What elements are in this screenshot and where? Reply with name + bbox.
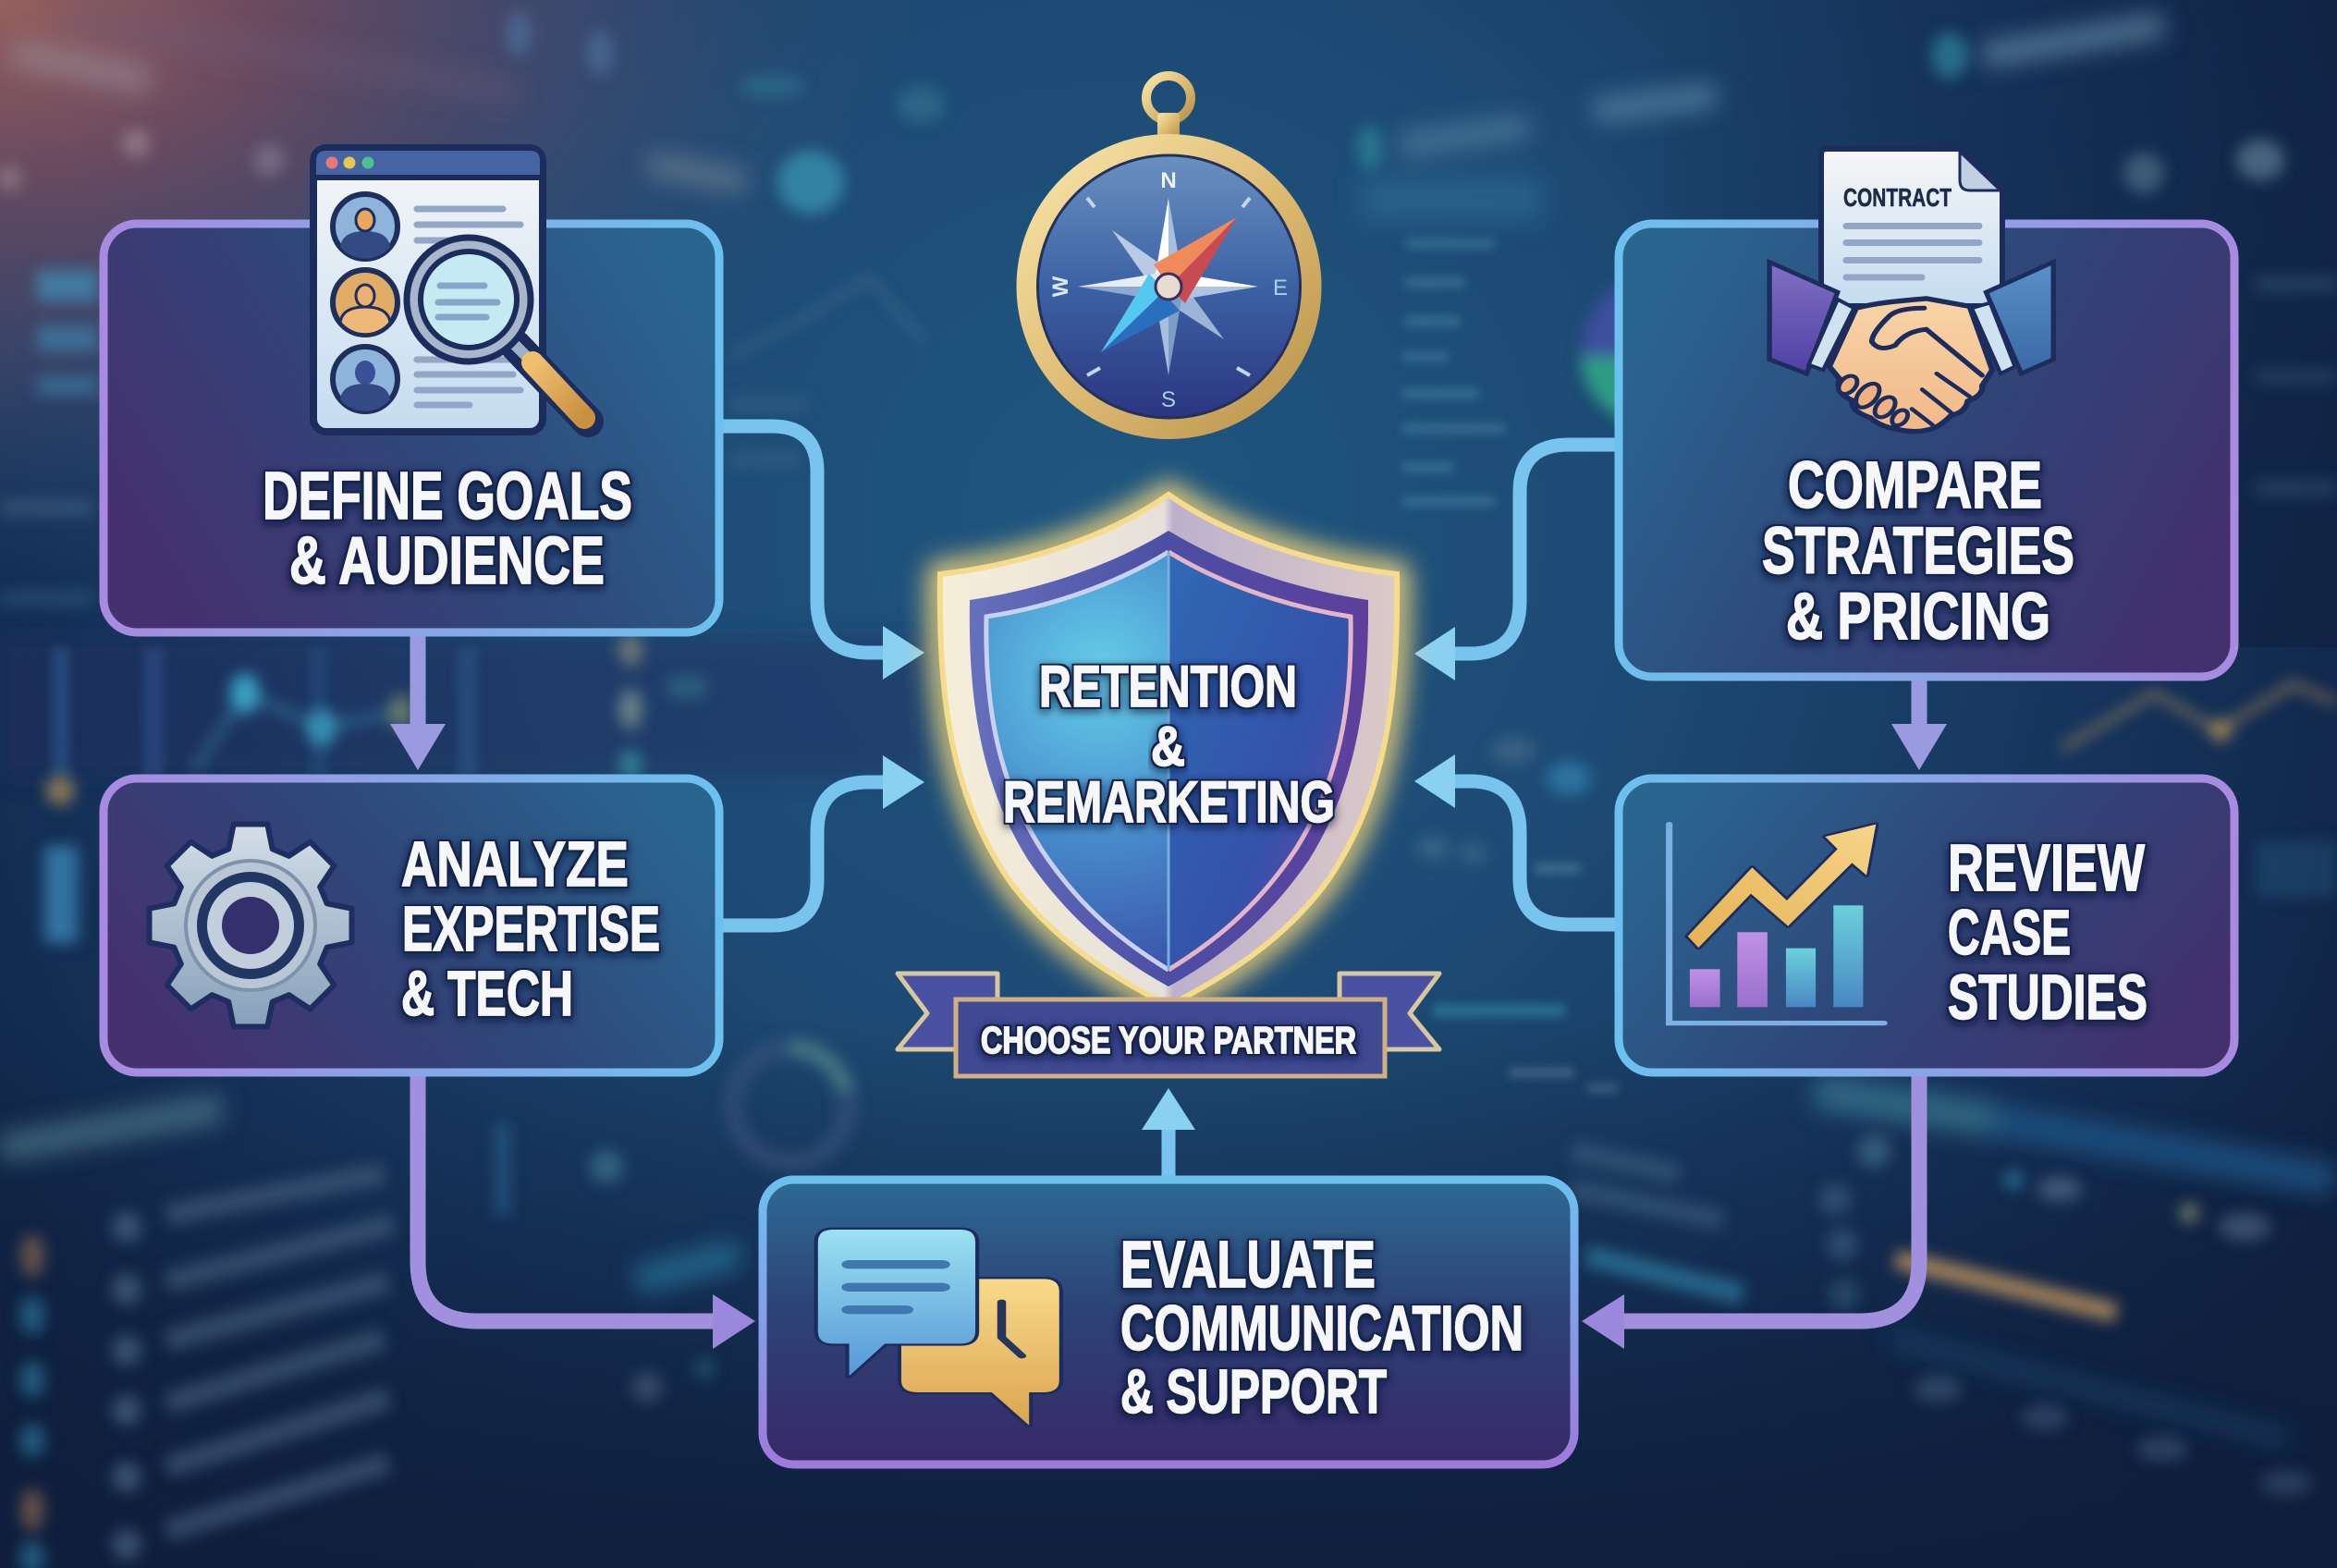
label: retention and remarketing: REMARKETING <box>1003 770 1335 835</box>
icon: contract document <box>1821 149 2002 306</box>
label: evaluate communication and support: COMMUNICATION <box>1120 1292 1523 1364</box>
icon: handshake <box>1769 263 2053 432</box>
icon: contract document: CONTRACT <box>1843 183 1952 212</box>
icon: compass: W <box>1048 276 1073 297</box>
label: compare strategies and pricing: COMPARE <box>1788 449 2042 522</box>
connector: analyze expertise to shield <box>723 755 924 925</box>
panel: review case studies <box>1619 778 2234 1072</box>
label: compare strategies and pricing <box>1762 449 2074 654</box>
icon: compass <box>1028 76 1311 428</box>
label: analyze expertise and tech: ANALYZE <box>401 828 629 900</box>
label: retention and remarketing: RETENTION <box>1039 655 1297 719</box>
label: define goals and audience: DEFINE GOALS <box>263 459 632 533</box>
ribbon: choose your partner: CHOOSE YOUR PARTNER <box>981 1019 1356 1061</box>
label: compare strategies and pricing: & PRICING <box>1786 581 2050 654</box>
icon: chat bubbles with clock <box>818 1230 1059 1426</box>
panel: define goals and audience <box>104 148 719 632</box>
arrow: evaluate communication to shield <box>1142 1088 1195 1176</box>
connector: review case studies to shield <box>1414 754 1615 925</box>
label: review case studies: REVIEW <box>1948 832 2145 905</box>
arrow: define goals to analyze expertise <box>390 636 446 770</box>
label: retention and remarketing: & <box>1151 716 1185 778</box>
label: define goals and audience: & AUDIENCE <box>289 524 605 598</box>
panel: evaluate communication and support <box>763 1180 1574 1464</box>
central shield: retention and remarketing <box>940 495 1397 1006</box>
connector: compare strategies to shield <box>1414 445 1615 680</box>
connector: define goals to shield <box>723 426 924 680</box>
panel: compare strategies and pricing <box>1619 149 2234 677</box>
label: analyze expertise and tech: & TECH <box>401 958 573 1029</box>
icon: compass: E <box>1273 276 1288 300</box>
label: compare strategies and pricing: STRATEGIES <box>1762 515 2074 588</box>
label: define goals and audience <box>263 459 632 598</box>
label: retention and remarketing <box>1003 655 1335 835</box>
label: evaluate communication and support: EVALUATE <box>1120 1229 1376 1302</box>
icon: compass: N <box>1160 168 1177 193</box>
icon: browser profiles with magnifier <box>313 148 588 432</box>
label: analyze expertise and tech: EXPERTISE <box>402 893 660 964</box>
ribbon: choose your partner <box>898 974 1439 1076</box>
connector: analyze expertise to evaluate communication <box>418 1075 755 1349</box>
icon: gear <box>150 825 351 1026</box>
label: analyze expertise and tech <box>401 828 660 1029</box>
label: review case studies: STUDIES <box>1948 962 2147 1033</box>
icon: growth bar chart <box>1670 825 1884 1023</box>
label: evaluate communication and support: & SUPPORT <box>1120 1357 1387 1427</box>
label: review case studies <box>1948 832 2147 1033</box>
label: review case studies: CASE <box>1948 897 2071 968</box>
label: evaluate communication and support <box>1120 1229 1523 1427</box>
connector: review case studies to evaluate communication <box>1582 1075 1919 1349</box>
arrow: compare strategies to review case studies <box>1891 680 1947 770</box>
panel: analyze expertise and tech <box>104 778 719 1072</box>
icon: compass: S <box>1161 387 1176 412</box>
